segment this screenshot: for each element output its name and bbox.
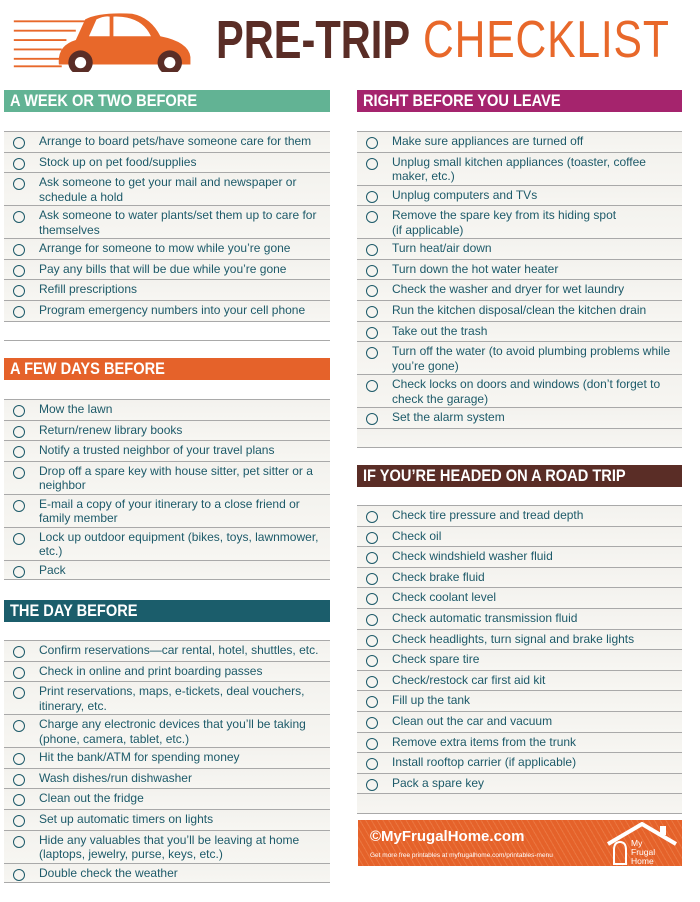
panel: a week or two before: Stock up on pet food/supplies — [39, 155, 196, 169]
panel: the day before: Wash dishes/run dishwasher — [39, 771, 192, 785]
icon: house logo: Frugal — [631, 847, 655, 857]
panel: right before you leave: Turn down the hot water heater — [392, 262, 558, 276]
heading: a week or two before — [4, 90, 330, 112]
panel: a week or two before: Program emergency numbers into your cell phone — [39, 303, 305, 317]
panel: the day before: Hide any valuables that you’ll be leaving at home — [39, 833, 299, 847]
title: PRE-TRIP — [216, 10, 410, 70]
panel: road trip: Check spare tire — [392, 652, 479, 666]
panel: road trip: Check automatic transmission fluid — [392, 611, 577, 625]
title — [216, 10, 670, 70]
panel: a few days before: Notify a trusted neighbor of your travel plans — [39, 443, 274, 457]
panel: right before you leave — [357, 90, 682, 448]
panel: road trip: Check headlights, turn signal and brake lights — [392, 632, 634, 646]
panel: road trip — [357, 465, 682, 814]
heading: a few days before: A FEW DAYS BEFORE — [10, 359, 165, 378]
panel: a few days before: family member — [39, 511, 118, 525]
panel: a few days before: Mow the lawn — [39, 402, 112, 416]
panel: a week or two before: Refill prescriptions — [39, 282, 137, 296]
panel: the day before: Clean out the fridge — [39, 791, 144, 805]
panel: a few days before: neighbor — [39, 478, 86, 492]
icon: house logo: My — [631, 838, 643, 848]
footer text: website: ©MyFrugalHome.com — [370, 828, 524, 845]
panel: the day before: Hit the bank/ATM for spending money — [39, 750, 240, 764]
panel: the day before: Print reservations, maps, e-tickets, deal vouchers, — [39, 684, 304, 698]
panel: right before you leave: (if applicable) — [392, 223, 463, 237]
panel: a few days before: etc.) — [39, 544, 62, 558]
panel: right before you leave: Take out the trash — [392, 324, 487, 338]
panel: right before you leave: you’re gone) — [392, 359, 459, 373]
heading: right before you leave — [357, 90, 682, 112]
panel: the day before: (laptops, jewelry, purse, keys, etc.) — [39, 847, 223, 861]
heading: the day before: THE DAY BEFORE — [10, 601, 138, 620]
panel: road trip: Check windshield washer fluid — [392, 549, 553, 563]
panel: road trip: Pack a spare key — [392, 776, 484, 790]
heading: road trip — [357, 465, 682, 487]
panel: the day before: Double check the weather — [39, 866, 178, 880]
panel: a week or two before: Pay any bills that will be due while you’re gone — [39, 262, 286, 276]
panel: right before you leave: Check the washer and dryer for wet laundry — [392, 282, 624, 296]
panel: right before you leave: Check locks on doors and windows (don’t forget to — [392, 377, 660, 391]
panel: road trip: Check tire pressure and tread depth — [392, 508, 583, 522]
icon: house logo: Home — [631, 856, 654, 866]
panel: road trip: Check coolant level — [392, 590, 496, 604]
heading: road trip: IF YOU’RE HEADED ON A ROAD TRIP — [363, 466, 626, 485]
footer text: tagline: Get more free printables at myfrugalhome.com/printables-menu — [370, 852, 553, 859]
heading: a week or two before: A WEEK OR TWO BEFORE — [10, 91, 197, 110]
panel: right before you leave: Make sure appliances are turned off — [392, 134, 583, 148]
panel: road trip: Install rooftop carrier (if applicable) — [392, 755, 576, 769]
panel: right before you leave: Run the kitchen disposal/clean the kitchen drain — [392, 303, 646, 317]
panel: the day before: (phone, camera, tablet, etc.) — [39, 732, 189, 746]
panel: road trip: Remove extra items from the trunk — [392, 735, 576, 749]
panel: a week or two before: Arrange to board pets/have someone care for them — [39, 134, 311, 148]
panel: road trip: Clean out the car and vacuum — [392, 714, 552, 728]
panel: right before you leave: Unplug small kitchen appliances (toaster, coffee — [392, 155, 646, 169]
panel: a few days before: Return/renew library books — [39, 423, 182, 437]
panel: right before you leave: maker, etc.) — [392, 169, 455, 183]
panel: right before you leave: Turn heat/air down — [392, 241, 492, 255]
panel: a few days before: E-mail a copy of your itinerary to a close friend or — [39, 497, 300, 511]
heading: the day before — [4, 600, 330, 622]
footer: brand banner — [358, 820, 682, 866]
panel: the day before: itinerary, etc. — [39, 699, 107, 713]
panel: the day before: Confirm reservations—car rental, hotel, shuttles, etc. — [39, 643, 318, 657]
panel: a week or two before — [4, 90, 330, 341]
title: CHECKLIST — [423, 11, 670, 69]
panel: a few days before: Pack — [39, 563, 66, 577]
panel: the day before: Charge any electronic devices that you’ll be taking — [39, 717, 306, 731]
icon: car — [14, 13, 190, 72]
panel: the day before: Set up automatic timers on lights — [39, 812, 213, 826]
panel: a week or two before: schedule a hold — [39, 190, 123, 204]
panel: a week or two before: Ask someone to water plants/set them up to care for — [39, 208, 316, 222]
panel: right before you leave: Unplug computers and TVs — [392, 188, 537, 202]
panel: a few days before: Lock up outdoor equipment (bikes, toys, lawnmower, — [39, 530, 318, 544]
panel: road trip: Check/restock car first aid kit — [392, 673, 545, 687]
panel: a week or two before: themselves — [39, 223, 100, 237]
panel: a few days before — [4, 358, 330, 580]
panel: right before you leave: check the garage) — [392, 392, 488, 406]
panel: right before you leave: Remove the spare key from its hiding spot — [392, 208, 616, 222]
panel: road trip: Check brake fluid — [392, 570, 485, 584]
panel: a few days before: Drop off a spare key with house sitter, pet sitter or a — [39, 464, 313, 478]
panel: right before you leave: Turn off the water (to avoid plumbing problems while — [392, 344, 670, 358]
panel: the day before — [4, 600, 330, 883]
panel: a week or two before: Ask someone to get your mail and newspaper or — [39, 175, 296, 189]
panel: the day before: Check in online and print boarding passes — [39, 664, 262, 678]
panel: road trip: Check oil — [392, 529, 441, 543]
panel: right before you leave: Set the alarm system — [392, 410, 505, 424]
heading: a few days before — [4, 358, 330, 380]
panel: road trip: Fill up the tank — [392, 693, 470, 707]
heading: right before you leave: RIGHT BEFORE YOU LEAVE — [363, 91, 561, 110]
icon: house logo — [607, 822, 677, 866]
panel: a week or two before: Arrange for someone to mow while you’re gone — [39, 241, 290, 255]
